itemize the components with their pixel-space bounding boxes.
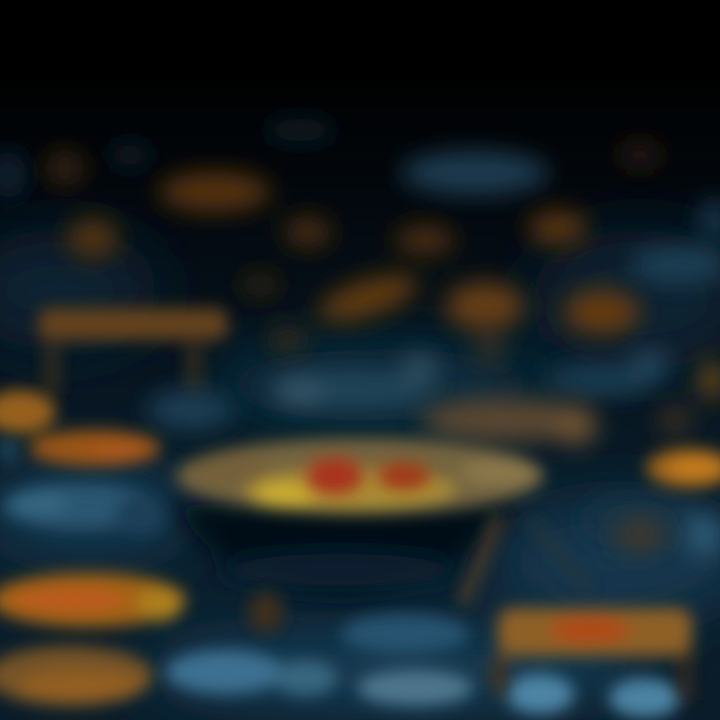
brown objects right of middle [421, 360, 720, 553]
right orange dish [646, 448, 720, 488]
bowl rim and soup [176, 438, 544, 514]
bottom right table with red dish [492, 608, 692, 700]
left blue dishes [0, 438, 166, 535]
chopsticks [462, 515, 590, 605]
table sign [38, 308, 228, 395]
upper orange patches [45, 139, 662, 362]
left orange dish [0, 390, 161, 466]
upper blue patches [0, 118, 720, 283]
lower blue dishes [165, 614, 681, 718]
middle blue blocks [146, 349, 720, 557]
left lower orange dish [0, 573, 186, 627]
red food in bowl [307, 458, 430, 494]
bowl body [175, 505, 510, 597]
small brown bottle [248, 592, 284, 632]
top vignette [0, 0, 720, 90]
bottom-left orange dish [0, 646, 154, 706]
dark blue haze [0, 230, 720, 710]
